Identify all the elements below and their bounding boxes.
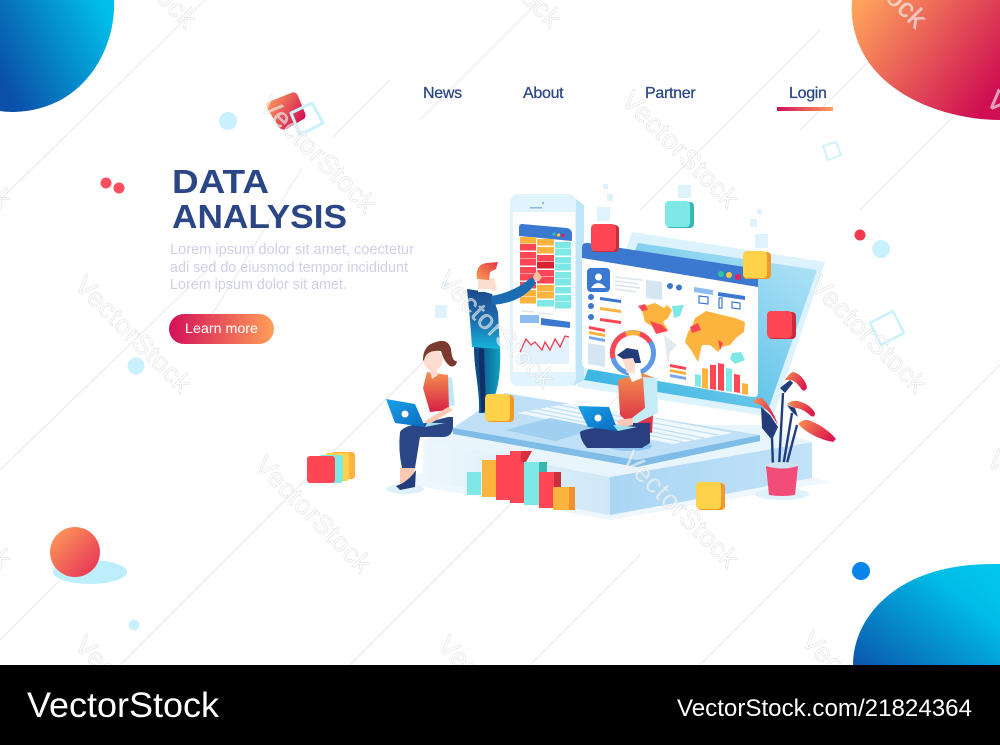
floating cubes xyxy=(591,201,796,510)
blob: top left xyxy=(0,0,114,112)
man laptop xyxy=(578,406,637,431)
title xyxy=(172,163,347,235)
woman laptop xyxy=(386,399,445,427)
bar chart xyxy=(670,363,748,395)
blob: bottom right xyxy=(853,564,1000,665)
yellow cube on laptop xyxy=(485,394,514,422)
navigation: About xyxy=(523,85,564,102)
watermarks: VectorStock xyxy=(69,270,198,399)
watermarks: VectorStock xyxy=(804,270,933,399)
laptop base xyxy=(453,393,760,467)
platform xyxy=(423,425,812,515)
decorative ball xyxy=(50,527,127,584)
platform shadow xyxy=(395,470,830,520)
plant xyxy=(753,372,836,500)
navigation xyxy=(423,85,833,111)
donut chart xyxy=(612,332,654,374)
watermarks: VectorStock xyxy=(254,90,383,219)
decorative rotated squares xyxy=(266,92,904,345)
watermarks: VectorStock xyxy=(616,85,745,214)
body text: adi sed do eiusmod tempor incididunt xyxy=(170,260,408,276)
title: DATA xyxy=(172,163,269,200)
laptop screen xyxy=(577,232,825,417)
person: seated man xyxy=(578,348,658,451)
footer url: VectorStock.com/21824364 xyxy=(677,695,972,722)
front bar chart blocks xyxy=(467,451,575,510)
footer brand: VectorStock xyxy=(27,686,220,725)
world map xyxy=(638,303,745,366)
body text: Lorem ipsum dolor sit amet, coectetur xyxy=(170,242,414,258)
footer bar xyxy=(0,665,1000,745)
phone table xyxy=(519,224,572,308)
watermarks: VectorStock xyxy=(616,445,745,574)
button: learn more xyxy=(169,314,274,344)
body text: Lorem ipsum dolor sit amet. xyxy=(170,277,347,293)
title: ANALYSIS xyxy=(172,198,347,235)
pale floating squares xyxy=(435,184,792,318)
body text xyxy=(170,242,414,293)
decorative dots xyxy=(100,112,890,630)
person: standing man xyxy=(467,262,542,413)
navigation: Login xyxy=(789,85,827,102)
button: learn more: Learn more xyxy=(185,320,258,336)
illustration: data analysis scene xyxy=(307,184,836,520)
navigation: News xyxy=(423,85,462,102)
active tab underline xyxy=(777,107,833,111)
dashboard window xyxy=(582,243,758,397)
phone xyxy=(510,194,584,386)
user avatar xyxy=(587,268,610,292)
navigation: Partner xyxy=(645,85,696,102)
phone line chart xyxy=(520,336,569,364)
watermarks: VectorStock xyxy=(249,450,378,579)
blob: top right xyxy=(852,0,1000,120)
list items xyxy=(588,294,621,367)
person: seated woman xyxy=(386,341,457,494)
watermarks: VectorStock xyxy=(432,265,561,394)
block stack xyxy=(307,452,355,483)
